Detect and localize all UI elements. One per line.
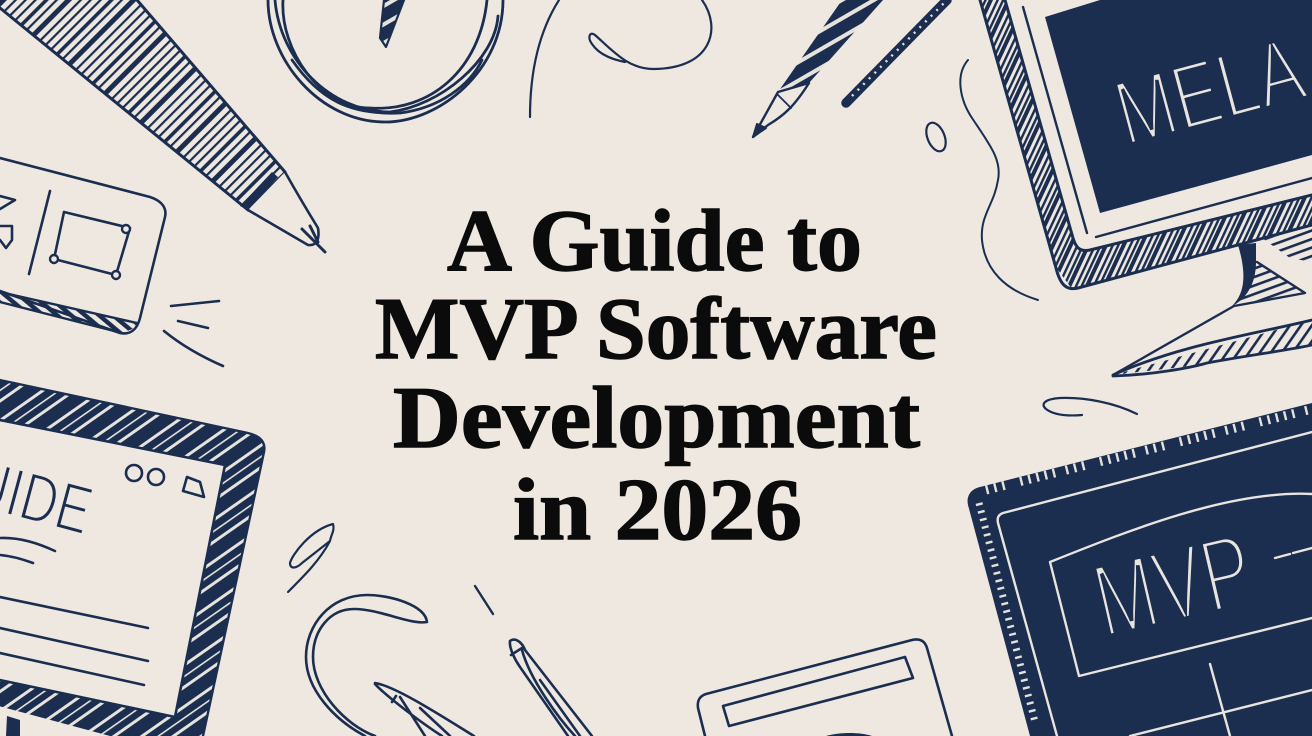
icon: motion ticks beside card [164, 301, 223, 366]
icon: thin dotted pen [846, 0, 947, 103]
icon: hatched pen top centre [753, 0, 883, 137]
panel: monitor top right [980, 0, 1312, 289]
icon: small oval [922, 120, 950, 154]
panel: browser window bottom left [0, 379, 264, 736]
icon: pen lower centre [510, 640, 592, 736]
title: Development [393, 370, 920, 467]
icon: wireframe card top left [0, 158, 165, 333]
icon: curve and loop scribble [530, 0, 711, 117]
icon: small swoosh [1044, 398, 1137, 415]
icon: short tick [475, 586, 493, 614]
icon: hook curve [306, 595, 427, 736]
icon: leaf scribble [288, 524, 334, 592]
icon: large hatched pencil top left [0, 0, 325, 252]
icon: monitor stand top right [1113, 226, 1312, 376]
icon: wavy line [960, 60, 1038, 300]
title: MVP Software [375, 281, 937, 378]
icon: card bottom centre [698, 639, 952, 736]
title [375, 193, 937, 559]
icon: scribbled circle with pen [268, 0, 503, 122]
panel: dark tablet bottom right [968, 403, 1312, 736]
icon: pen lower left centre [375, 683, 474, 736]
title: A Guide to [447, 193, 862, 290]
title: in 2026 [513, 462, 802, 559]
